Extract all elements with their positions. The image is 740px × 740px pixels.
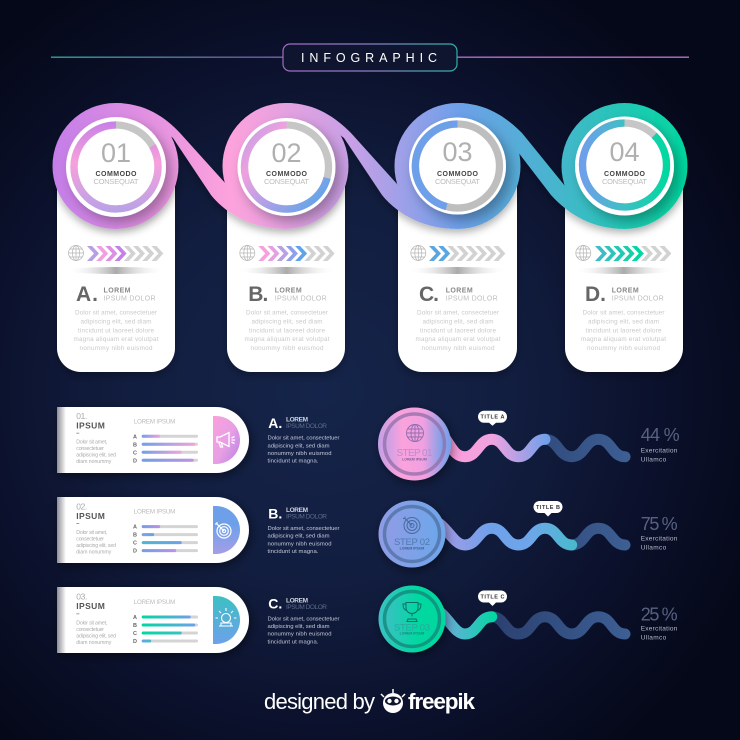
text block A: adipiscing elit, sed diam <box>268 443 330 449</box>
row body text: diam nonummy <box>76 640 112 646</box>
icon: globe C <box>411 246 426 260</box>
card D content <box>574 246 674 352</box>
progress ring 01 <box>74 125 158 209</box>
row body text: diam nonummy <box>76 550 112 556</box>
bar chart: B <box>133 623 137 629</box>
body text C: magna aliquam erat volutpat <box>416 336 501 343</box>
callout: title C: TITLE C <box>480 594 505 600</box>
icon: target <box>403 516 420 534</box>
row heading: IPSUM <box>76 511 105 521</box>
divider shadow B <box>236 267 336 274</box>
icon: trophy <box>403 602 421 622</box>
step circle C: LOREM IPSUM <box>400 632 424 636</box>
divider shadow A <box>66 267 166 274</box>
body text B: adipiscing elit, sed diam <box>252 318 322 325</box>
dash <box>76 522 79 525</box>
circle 04 <box>575 116 674 216</box>
text block C: IPSUM DOLOR <box>286 604 327 611</box>
bar chart: D <box>133 458 137 464</box>
heading A: LOREM <box>104 288 131 294</box>
callout: title A: TITLE A <box>480 415 505 421</box>
body text A: magna aliquam erat volutpat <box>74 336 159 343</box>
row body text: consectetuer <box>76 446 104 452</box>
card B background <box>227 160 345 372</box>
text block B: nonummy nibh euismod <box>268 541 332 547</box>
step circle B: LOREM IPSUM <box>400 546 424 550</box>
left edge shade <box>57 587 66 653</box>
wave progress C <box>440 612 492 634</box>
text block C: tincidunt ut magna. <box>268 639 319 645</box>
stat A: 44 % <box>641 425 680 445</box>
step label: STEP 01 <box>396 448 433 459</box>
body text C: Dolor sit amet, consectetuer <box>417 310 499 316</box>
panel: row 1 bar card <box>57 407 249 473</box>
footer credit <box>264 689 475 714</box>
heading C: LOREM <box>446 288 473 294</box>
stat C: Ullamco <box>641 635 667 642</box>
row number: 03. <box>76 592 87 602</box>
panel: row 3 bar card <box>57 587 249 653</box>
body text C: tincidunt ut laoreet dolore <box>420 327 496 334</box>
body text B: tincidunt ut laoreet dolore <box>249 327 325 334</box>
stat C: Exercitation <box>641 626 678 633</box>
panel: top step cards <box>52 103 688 372</box>
label 01 <box>94 171 139 186</box>
arrow meter C <box>429 246 505 261</box>
ribbon with discs <box>52 103 688 229</box>
header <box>51 44 689 71</box>
icon: globe <box>406 424 424 442</box>
body text A: nonummy nibh euismod <box>80 345 153 352</box>
number 03: 03 <box>442 137 473 167</box>
stat A: Ullamco <box>641 456 667 463</box>
step label: STEP 02 <box>394 537 430 548</box>
stat B <box>641 514 678 551</box>
body text B: Dolor sit amet, consectetuer <box>246 310 328 316</box>
callout: title A <box>478 411 507 426</box>
circle 02 <box>238 118 336 216</box>
divider shadow D <box>574 267 674 274</box>
heading A: IPSUM DOLOR <box>104 296 156 303</box>
row body text: Dolor sit amet, <box>76 620 107 626</box>
label 03: COMMODO <box>437 171 479 178</box>
label 02: CONSEQUAT <box>264 177 309 186</box>
icon: freepik mascot <box>381 689 405 713</box>
row heading: IPSUM <box>76 601 105 611</box>
heading B <box>275 288 327 303</box>
text block A: nonummy nibh euismod <box>268 451 332 457</box>
body text D: magna aliquam erat volutpat <box>581 336 666 343</box>
semicircle <box>213 416 240 464</box>
arrow meter A <box>87 246 163 261</box>
body text A: adipiscing elit, sed diam <box>80 318 152 325</box>
body text D: tincidunt ut laoreet dolore <box>586 327 662 334</box>
callout: title B <box>534 501 562 516</box>
icon: idea bulb <box>216 608 236 626</box>
stat C: 25 % <box>641 605 678 625</box>
bar chart title: LOREM IPSUM <box>134 418 175 425</box>
row body text: Dolor sit amet, <box>76 530 107 536</box>
number 02: 02 <box>271 138 302 168</box>
card shape <box>57 587 249 653</box>
body text D <box>581 310 666 352</box>
bar chart: D <box>133 639 137 645</box>
step circle A <box>378 408 451 480</box>
bar chart: A <box>133 434 137 440</box>
heading B: LOREM <box>275 288 302 294</box>
wave track A <box>545 439 625 457</box>
text block B: LOREM <box>286 507 308 514</box>
card shape <box>57 407 249 473</box>
icon: globe D <box>576 246 591 260</box>
row body text <box>76 530 116 556</box>
heading D: IPSUM DOLOR <box>612 296 664 303</box>
step label: STEP 03 <box>394 622 430 634</box>
wave chart B <box>440 524 625 545</box>
row body text <box>76 620 116 646</box>
bar chart <box>133 525 198 555</box>
number 01: 01 <box>101 138 131 168</box>
step circle A: LOREM IPSUM <box>402 458 427 462</box>
wave chart C <box>440 612 625 634</box>
row number: 01. <box>76 411 87 421</box>
bar chart: C <box>133 450 137 456</box>
icon: megaphone <box>217 432 235 447</box>
divider shadow C <box>408 267 508 274</box>
label 02: COMMODO <box>266 171 308 178</box>
body text C: nonummy nibh euismod <box>422 345 495 352</box>
row body text: Dolor sit amet, <box>76 440 107 446</box>
circle 01 <box>66 117 166 217</box>
text block B: IPSUM DOLOR <box>286 514 327 520</box>
footer credit: designed by <box>264 689 375 714</box>
text block A: IPSUM DOLOR <box>286 423 327 430</box>
progress ring 02 <box>244 125 328 209</box>
text block A: A. <box>268 415 282 431</box>
row heading: IPSUM <box>76 420 105 430</box>
row body text: adipiscing elit, sed <box>76 543 116 549</box>
row body text: adipiscing elit, sed <box>76 453 116 459</box>
bar chart title: LOREM IPSUM <box>134 599 175 606</box>
text block C <box>268 596 340 645</box>
stat A <box>641 425 680 463</box>
bar chart: C <box>133 541 137 547</box>
label 02 <box>264 171 309 186</box>
bar chart: A <box>133 525 137 531</box>
callout: title C <box>478 590 507 606</box>
dash <box>76 432 79 434</box>
icon: globe B <box>240 246 255 260</box>
body text D: adipiscing elit, sed diam <box>588 318 659 325</box>
row body text <box>76 440 116 465</box>
bar chart: C <box>133 631 137 637</box>
label 04 <box>602 171 647 186</box>
icon: globe A <box>68 246 84 260</box>
body text D: nonummy nibh euismod <box>587 345 660 352</box>
card D background <box>565 160 683 372</box>
text block C: adipiscing elit, sed diam <box>268 624 330 630</box>
step circle B <box>378 500 446 568</box>
step circle C <box>378 586 446 652</box>
text block B: B. <box>268 505 282 521</box>
text block A: Dolor sit amet, consectetuer <box>268 436 340 442</box>
stat B: Exercitation <box>641 535 678 542</box>
row body text: consectetuer <box>76 627 104 633</box>
title: INFOGRAPHIC <box>301 51 437 65</box>
text block C: LOREM <box>286 597 308 604</box>
row body text: diam nonummy <box>76 459 112 465</box>
panel: row 2 bar card <box>57 497 249 563</box>
number 04: 04 <box>609 137 640 167</box>
label 01: COMMODO <box>96 171 137 178</box>
heading D <box>612 288 664 303</box>
card A content <box>66 246 166 352</box>
row body text: consectetuer <box>76 536 104 542</box>
body text B: nonummy nibh euismod <box>250 345 324 352</box>
heading B: IPSUM DOLOR <box>275 296 327 303</box>
text block B: adipiscing elit, sed diam <box>268 534 330 540</box>
left edge shade <box>57 497 66 563</box>
header rule <box>51 56 689 58</box>
body text A: tincidunt ut laoreet dolore <box>78 327 154 334</box>
dash <box>76 612 79 615</box>
bar chart <box>133 434 198 464</box>
text block B: tincidunt ut magna. <box>268 549 319 555</box>
text block C: nonummy nibh euismod <box>268 632 332 638</box>
icon: target <box>215 522 231 538</box>
text block B: Dolor sit amet, consectetuer <box>268 526 340 532</box>
text block B <box>268 505 340 555</box>
body text B: magna aliquam erat volutpat <box>244 336 330 343</box>
card A background <box>57 160 175 372</box>
heading C: IPSUM DOLOR <box>446 296 498 303</box>
arrow meter D <box>595 246 671 261</box>
bar chart title: LOREM IPSUM <box>134 509 175 516</box>
semicircle <box>213 506 240 554</box>
bar chart: B <box>133 442 137 448</box>
circle 03 <box>409 118 506 214</box>
row number: 02. <box>76 501 87 511</box>
callout: title B: TITLE B <box>536 505 560 511</box>
text block A <box>268 415 340 465</box>
body text B <box>244 310 330 352</box>
body text C: adipiscing elit, sed diam <box>422 318 494 325</box>
row body text: adipiscing elit, sed <box>76 633 116 639</box>
card C background <box>398 160 517 372</box>
stat B: 75 % <box>641 514 678 534</box>
letter A: A. <box>76 283 98 306</box>
card B content <box>236 246 336 352</box>
wave track C <box>492 617 625 634</box>
semicircle <box>213 596 240 644</box>
text block C: Dolor sit amet, consectetuer <box>268 616 340 622</box>
label 04: CONSEQUAT <box>602 177 647 186</box>
letter C: C. <box>419 283 439 306</box>
wave progress B <box>440 524 572 545</box>
footer credit: freepik <box>408 689 475 714</box>
text block C: C. <box>268 596 282 612</box>
label 03 <box>435 171 480 186</box>
progress ring 03 <box>415 124 500 208</box>
card shape <box>57 497 249 563</box>
letter B: B. <box>248 283 268 306</box>
body text D: Dolor sit amet, consectetuer <box>582 310 664 316</box>
body text C <box>416 310 501 352</box>
label 01: CONSEQUAT <box>94 177 139 186</box>
stat C <box>641 605 678 642</box>
stat B: Ullamco <box>641 544 667 551</box>
bar chart: A <box>133 615 137 621</box>
bar chart <box>133 615 198 645</box>
body text A: Dolor sit amet, consectetuer <box>75 310 157 316</box>
letter D: D. <box>585 283 606 306</box>
card C content <box>408 246 508 352</box>
bar chart: B <box>133 533 137 539</box>
bar chart: D <box>133 549 137 555</box>
heading D: LOREM <box>612 288 639 294</box>
label 03: CONSEQUAT <box>435 177 480 186</box>
heading A <box>104 288 156 303</box>
label 04: COMMODO <box>604 171 646 178</box>
title badge <box>283 44 457 71</box>
body text A <box>74 310 159 352</box>
text block A: LOREM <box>286 417 308 424</box>
wave track B <box>572 528 625 545</box>
wave chart A <box>445 438 625 457</box>
heading C <box>446 288 498 303</box>
arrow meter B <box>258 246 335 261</box>
stat A: Exercitation <box>641 447 678 454</box>
progress ring 04 <box>582 123 667 207</box>
left edge shade <box>57 407 66 473</box>
wave progress A <box>445 438 545 457</box>
text block A: tincidunt ut magna. <box>268 459 319 465</box>
